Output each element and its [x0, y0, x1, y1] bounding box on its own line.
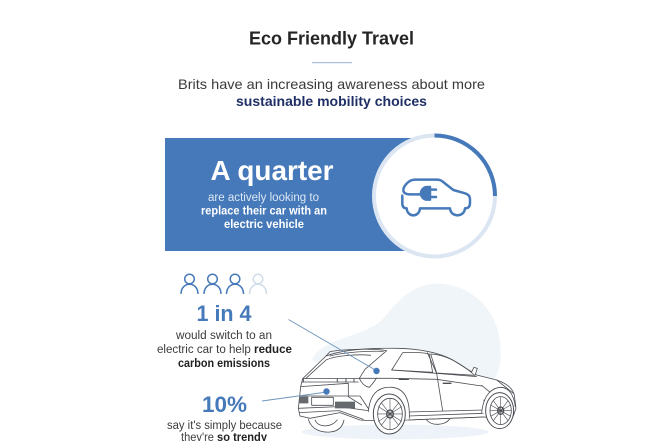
background blob	[312, 284, 501, 393]
far wheels	[308, 419, 344, 432]
text: trendy	[167, 420, 282, 441]
title divider	[312, 62, 352, 63]
roof and spoiler	[326, 349, 387, 378]
banner heading: A quarter	[210, 155, 334, 186]
rear window	[306, 355, 371, 378]
body	[298, 348, 516, 421]
pointer: trendy	[262, 388, 330, 401]
title: Eco Friendly Travel	[249, 28, 414, 48]
banner text	[201, 192, 327, 231]
text: switch to electric: electric car to help reduce	[157, 344, 292, 356]
text: switch to electric: carbon emissions	[178, 358, 270, 370]
side windows	[392, 352, 433, 372]
panel: a quarter banner	[165, 136, 495, 256]
pointer: reduce emissions	[288, 320, 380, 374]
tail lights	[302, 379, 359, 382]
text: switch to electric	[157, 330, 292, 370]
progress ring	[374, 136, 495, 256]
text: switch to electric: would switch to an	[175, 330, 272, 342]
panel: car illustration	[298, 284, 516, 439]
belt line	[360, 378, 482, 386]
ground shadow	[302, 425, 488, 439]
banner text: replace their car with an	[201, 206, 327, 218]
front wheel	[482, 387, 515, 429]
quarter panel	[359, 378, 377, 387]
stat: 1 in 4: 1 in 4	[196, 301, 252, 326]
door details	[399, 379, 451, 383]
boot and bumper	[301, 383, 362, 405]
banner text: electric vehicle	[224, 219, 304, 231]
subtitle: sustainable mobility choices	[236, 93, 427, 109]
banner background	[165, 138, 435, 251]
rear wheel	[368, 387, 409, 434]
icon: electric car	[402, 180, 470, 215]
car	[298, 348, 516, 434]
stat: 10%: 10%	[202, 392, 247, 417]
text: trendy: say it's simply because	[167, 420, 282, 432]
icon: four people	[181, 274, 266, 294]
banner text: are actively looking to	[208, 192, 319, 204]
subtitle: Brits have an increasing awareness about more	[178, 76, 485, 92]
subtitle	[178, 76, 485, 109]
